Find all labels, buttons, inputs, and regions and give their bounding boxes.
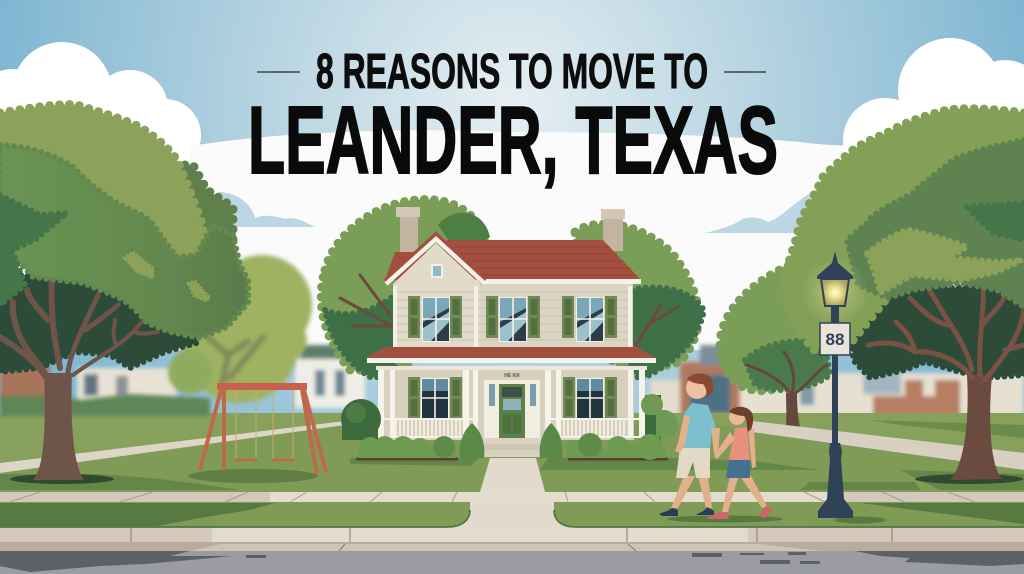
door surround (484, 380, 540, 438)
lamp post (832, 355, 838, 475)
tree behind house, left (321, 200, 490, 377)
side shrub right (641, 394, 678, 440)
curb lower band centre (190, 544, 820, 551)
porch roof (365, 347, 656, 358)
chimney right (601, 209, 625, 251)
left tree leaf highlights (124, 252, 210, 301)
man shoes (659, 507, 714, 516)
lower walkway (448, 502, 575, 528)
girl legs (722, 476, 767, 512)
cone shrub left (460, 423, 484, 458)
far bushes (0, 394, 210, 416)
right tree mid layer (847, 140, 1024, 307)
foundation bushes right (566, 433, 666, 460)
porch steps (480, 438, 544, 457)
left tree underside (0, 275, 197, 372)
lawn shadows (0, 458, 1024, 490)
shrubs beside porch (341, 394, 678, 460)
lamp base (818, 443, 853, 518)
small blue cloud right (704, 190, 815, 233)
sidelights (489, 384, 536, 406)
man hair (687, 373, 713, 397)
girl arm (714, 429, 756, 468)
porch columns (378, 370, 645, 438)
cone shrub right (540, 423, 562, 458)
sidewalk joints (10, 492, 975, 502)
right tree dark patch (967, 203, 1024, 240)
lamp sign 88: 88 (826, 330, 844, 349)
gable wall (393, 243, 480, 350)
sidewalk sunlit section (270, 492, 830, 502)
background lawn (0, 413, 1024, 493)
person shadow (667, 516, 783, 522)
right tree branches (868, 277, 1024, 380)
front lawn (0, 425, 1024, 492)
girl head (729, 409, 745, 425)
girl hair (729, 407, 753, 432)
girl shorts (726, 460, 750, 478)
front door (499, 384, 525, 438)
upper windows (408, 296, 617, 342)
gable trim (386, 236, 484, 282)
clouds right (843, 38, 1024, 350)
swing legs (200, 390, 326, 475)
man shirt (683, 403, 716, 448)
far lawn shade right (870, 420, 1024, 438)
title top line: 8 REASONS TO MOVE TO (316, 45, 708, 99)
street lamp (801, 251, 869, 518)
mid tree on right (720, 265, 830, 443)
porch wall (384, 368, 634, 440)
swing shadow (188, 469, 318, 483)
swing beam (217, 383, 307, 390)
lamp halo (801, 258, 869, 326)
porch fascia (367, 358, 656, 363)
right tree light crown (784, 109, 1024, 350)
swing ropes (236, 390, 293, 458)
foundation bushes left (358, 436, 456, 458)
lawn strip shade (0, 503, 1024, 526)
girl shoes (707, 506, 773, 519)
lamp shadow (834, 516, 886, 524)
tree behind house, right (575, 224, 704, 380)
distant houses left (0, 345, 365, 408)
left garden path (0, 421, 345, 473)
left tree branches (0, 270, 158, 378)
white cloud bank behind title (190, 130, 880, 350)
chimney left (396, 207, 420, 257)
curb lower band (0, 542, 1024, 551)
roof tile lines (445, 247, 636, 275)
man head (686, 377, 708, 399)
house number plate: HE KR (504, 373, 520, 379)
blurred background tree (168, 255, 312, 403)
left tree light crown (0, 105, 205, 262)
swing set (188, 386, 326, 483)
front lawn strip right (554, 502, 1024, 527)
girl top (729, 427, 750, 460)
right tree light patch (867, 230, 1022, 293)
lower windows (408, 377, 617, 419)
man legs (671, 476, 712, 508)
road (0, 551, 1024, 574)
main roof (430, 240, 640, 279)
distant houses right (650, 345, 1024, 416)
girl walking (707, 407, 773, 519)
clouds left (0, 42, 201, 350)
swing seats (235, 459, 294, 461)
lamp lantern (817, 251, 853, 324)
siding lines (393, 292, 633, 340)
left tree trunk (33, 373, 84, 480)
walls (393, 284, 633, 350)
right tree underside (853, 285, 1024, 378)
sidewalk (0, 492, 1024, 502)
title (248, 45, 778, 194)
left tree dark layer (0, 195, 67, 305)
porch beam (376, 366, 647, 370)
side shrub left (341, 399, 381, 440)
lawn edge (0, 510, 1024, 527)
man arms (675, 415, 720, 456)
curb highlight (212, 528, 748, 542)
big right tree (784, 109, 1024, 484)
left tree outer lobe (165, 165, 233, 280)
left tree mid layer (0, 145, 248, 338)
house (365, 207, 656, 457)
man walking (659, 373, 720, 516)
right tree trunk (950, 375, 1002, 480)
gable window (431, 264, 443, 278)
lamp sign 88 (820, 323, 850, 355)
eave trim (487, 279, 641, 284)
left tree shadow (10, 474, 114, 484)
big left tree (0, 105, 248, 484)
small blue cloud left (218, 192, 315, 227)
wall corner trims (395, 286, 630, 347)
front lawn strip left (0, 502, 470, 527)
side roof slope (385, 252, 436, 280)
man shorts (676, 448, 710, 478)
right tree shadow (915, 474, 1023, 484)
front walkway upper (480, 458, 545, 492)
road shadows (0, 551, 1024, 572)
railings (378, 419, 645, 437)
gable white trim (386, 239, 484, 284)
right garden path (752, 421, 1024, 470)
mulch beds (356, 458, 668, 460)
curb joints (131, 528, 892, 551)
curb (0, 528, 1024, 542)
